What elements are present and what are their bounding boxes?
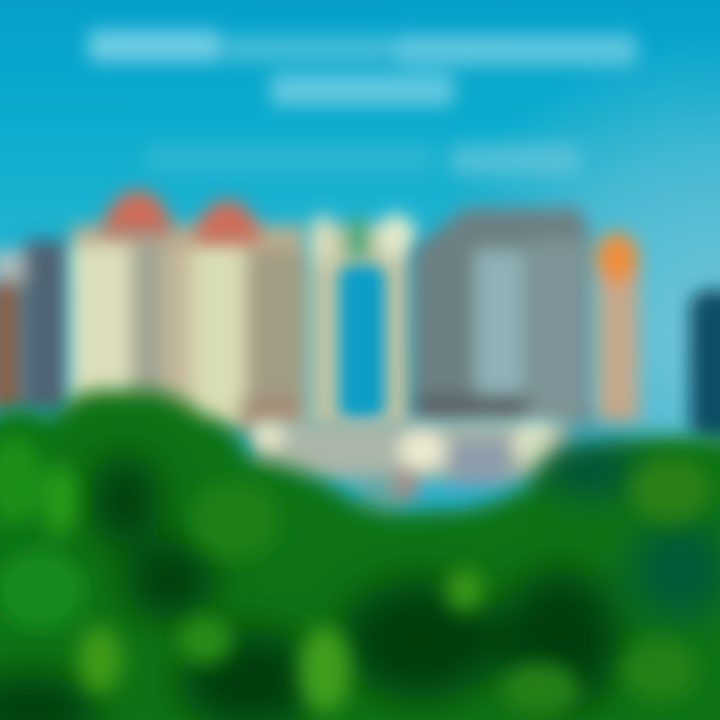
far right dark building [690,290,720,440]
blue glass facade [339,265,385,421]
bright foliage [0,435,710,718]
building base and lights [250,420,570,520]
tree canopy [0,391,720,720]
left hotel tower [70,225,310,435]
orange tower [595,232,639,422]
right hotel tower [412,208,592,425]
foreground trees [0,391,720,720]
dark foliage [0,445,720,720]
red domes [100,190,262,242]
title: illegible blurred lines [88,30,637,106]
far left buildings [0,240,68,410]
central tower with blue glass [308,214,416,430]
hotel buildings [0,190,720,520]
subtitle: illegible blurred line [145,143,580,176]
